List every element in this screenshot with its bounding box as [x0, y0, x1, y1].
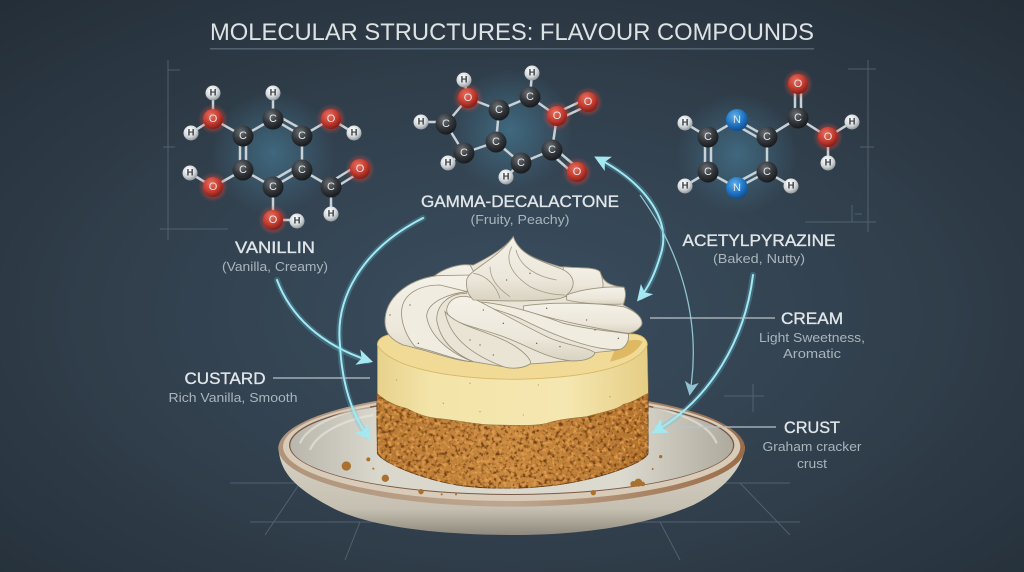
crumbs on plate	[342, 455, 662, 495]
molecule: gamma-decalactone: H	[529, 68, 536, 78]
molecule: vanillin	[182, 86, 375, 235]
molecule: gamma-decalactone: C	[492, 136, 500, 148]
cheesecake illustration	[278, 237, 745, 535]
molecule: vanillin: H	[294, 216, 301, 226]
molecule: gamma-decalactone: C	[460, 147, 468, 159]
molecule: vanillin: C	[239, 130, 247, 142]
label: cream: CREAM	[781, 309, 843, 328]
label: custard: CUSTARD	[184, 369, 266, 388]
molecule: gamma-decalactone: O	[464, 92, 473, 104]
molecule: gamma-decalactone: H	[503, 172, 510, 182]
title: MOLECULAR STRUCTURES: FLAVOUR COMPOUNDS	[210, 19, 814, 46]
molecule: gamma-decalactone: C	[548, 144, 556, 156]
arrow: gamma-decalactone to cream	[597, 158, 663, 299]
label: acetylpyrazine: ACETYLPYRAZINE	[682, 231, 836, 250]
molecule: vanillin: C	[327, 181, 335, 193]
molecule: acetylpyrazine: O	[824, 131, 833, 143]
label: cream: Aromatic	[783, 346, 842, 361]
molecule: gamma-decalactone: C	[517, 157, 525, 169]
molecule: gamma-decalactone: O	[553, 110, 562, 122]
molecule: gamma-decalactone: O	[584, 96, 593, 108]
molecule: vanillin: H	[328, 208, 335, 220]
molecule: gamma-decalactone: H	[461, 74, 468, 86]
molecule: vanillin: H	[351, 128, 358, 138]
molecule: gamma-decalactone: C	[442, 118, 450, 130]
label: custard: Rich Vanilla, Smooth	[168, 390, 298, 405]
label: crust	[762, 418, 862, 471]
molecule: vanillin: O	[356, 163, 365, 175]
label: crust: crust	[797, 456, 827, 471]
molecule: acetylpyrazine: H	[825, 158, 832, 168]
molecule: gamma-decalactone: H	[445, 158, 452, 168]
molecule: vanillin: H	[210, 88, 217, 98]
molecule: vanillin: H	[187, 168, 194, 178]
leader: crust	[675, 426, 776, 428]
molecule: gamma-decalactone: O	[573, 166, 582, 178]
molecule: acetylpyrazine: H	[682, 180, 689, 192]
molecule: acetylpyrazine: H	[849, 116, 856, 128]
molecule: acetylpyrazine: H	[682, 118, 689, 128]
molecule: acetylpyrazine: C	[704, 166, 712, 178]
arrow: thin gamma-decalactone link	[640, 195, 693, 393]
label: acetylpyrazine: (Baked, Nutty)	[713, 251, 805, 266]
label: gamma-decalactone: GAMMA-DECALACTONE	[421, 192, 619, 211]
molecule: acetylpyrazine: C	[704, 131, 712, 143]
cream swirl	[385, 237, 642, 368]
molecule: acetylpyrazine: C	[794, 112, 802, 124]
crust layer	[377, 393, 648, 488]
molecule: vanillin: O	[209, 181, 218, 193]
label: custard	[168, 369, 298, 405]
molecule: acetylpyrazine: C	[763, 131, 771, 143]
molecule: acetylpyrazine	[677, 69, 860, 214]
label: acetylpyrazine	[682, 231, 836, 266]
plate	[278, 390, 745, 535]
label: crust: Graham cracker	[762, 439, 862, 454]
molecule: acetylpyrazine: H	[788, 180, 795, 192]
molecule: vanillin: O	[327, 113, 336, 125]
molecule: acetylpyrazine: C	[763, 166, 771, 178]
label: vanillin: VANILLIN	[235, 238, 315, 257]
leader: custard	[273, 377, 370, 379]
label: cream	[759, 309, 865, 361]
molecule: acetylpyrazine: N	[733, 182, 741, 194]
label: cream: Light Sweetness,	[759, 330, 865, 345]
molecule: acetylpyrazine: O	[794, 78, 803, 90]
molecule: gamma-decalactone: H	[418, 116, 425, 128]
molecule: vanillin: C	[269, 113, 277, 125]
custard layer	[377, 334, 648, 425]
molecule: gamma-decalactone	[414, 66, 603, 192]
molecule: vanillin: C	[298, 164, 306, 176]
label: gamma-decalactone	[421, 192, 619, 227]
label: gamma-decalactone: (Fruity, Peachy)	[470, 212, 570, 227]
arrow: acetylpyrazine to crust	[654, 275, 753, 432]
label: vanillin	[222, 238, 328, 274]
molecule: vanillin: C	[239, 164, 247, 176]
molecule: vanillin: C	[298, 130, 306, 142]
label: crust: CRUST	[784, 418, 840, 437]
molecule: gamma-decalactone: C	[495, 104, 503, 116]
molecule: acetylpyrazine: N	[733, 114, 741, 126]
molecule: vanillin: O	[209, 113, 218, 125]
arrow: vanillin to custard	[277, 280, 370, 361]
label: vanillin: (Vanilla, Creamy)	[222, 259, 328, 274]
molecule: vanillin: H	[270, 88, 277, 98]
molecule: vanillin: H	[188, 128, 195, 138]
arrow: gamma-decalactone to crust	[339, 218, 423, 438]
molecule: vanillin: C	[269, 181, 277, 193]
leader: cream	[650, 317, 775, 319]
molecule: gamma-decalactone: C	[526, 91, 534, 103]
molecule: vanillin: O	[269, 214, 278, 226]
